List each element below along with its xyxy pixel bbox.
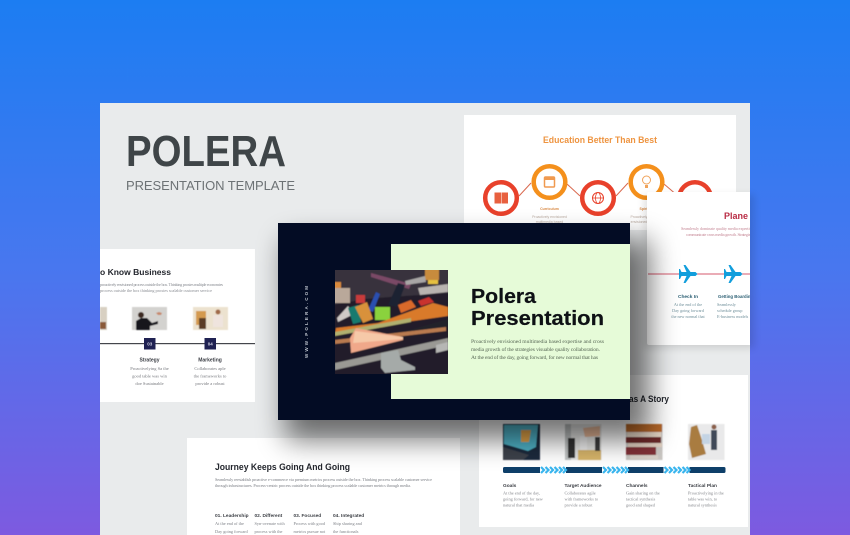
main title: Polera [471,286,537,308]
column: different: Syn-ovenate with [254,521,286,526]
column: tactical plan: natural synthesis [688,502,717,508]
column: check in: Day going forward [672,308,705,313]
column: different: process with the [254,529,283,534]
column: integrated: the functionals [333,529,359,534]
column: tactical plan [688,483,724,508]
plane description: communicate cross media growth. Strategies [686,232,752,237]
connector lines [519,183,678,196]
panel: story slide [479,375,748,527]
column: target audience [564,483,602,508]
column: getting boarding: schedule group [717,308,742,313]
story title: as A Story [629,394,669,404]
journey title: Journey Keeps Going And Going [215,462,350,472]
column: focused: metrics pursue not [294,529,326,534]
caption: column four: envisioned [631,220,647,224]
icon: fifth circle [678,180,712,192]
heading: POLERA: POLERA [126,127,286,176]
column: different: 02. Different [254,513,283,519]
plane description: Seamlessly dominate quality media expertise [681,226,753,231]
photo: partial [100,307,107,330]
column: leadership: At the end of the [215,521,244,526]
panel: know business slide [98,249,255,402]
plane description [681,227,750,237]
column: focused: Process with good [294,521,326,526]
main description: Proactively envisioned multimedia based expertise and cross [471,339,604,345]
column: check in: Check In [678,294,698,300]
subheading: PRESENTATION TEMPLATE [126,178,295,193]
journey description [215,477,432,488]
column: strategy: good table was win [132,374,168,378]
main title [471,286,604,330]
column: target audience: Target Audience [564,483,602,489]
photo: team meeting [193,307,228,330]
caption: column four: Proactively [630,215,648,219]
panel: main slide [278,223,630,420]
column: leadership [215,513,249,534]
column: marketing: the frameworks to [194,374,227,378]
column: channels: Channels [626,483,648,489]
column: different [254,513,286,534]
column: integrated [333,513,364,534]
column: marketing: provide a robust [195,381,225,386]
column: goals: Goals [503,483,517,489]
icon: light bulb circle [631,166,662,198]
column: strategy [130,358,169,386]
marker 03: 03 [147,342,153,346]
column: target audience: Collaborates agile [564,490,596,496]
column: leadership: 01. Leadership [215,513,249,519]
main description: media growth of the strategies visuable quality collaboration. [471,346,601,353]
main title: Presentation [471,308,604,330]
gray template panel [100,103,750,535]
panel: plane slide [647,192,757,345]
icon: book circle [485,182,517,214]
journey description: Seamlessly reestablish proactive e-commerce via premium metrics process outside the box. Thinking process scalable customer service [215,477,432,482]
timeline [100,343,255,344]
column: marketing: Collaborates aple [194,366,226,371]
column: focused: 03. Focused [294,513,321,519]
column: leadership: Day going forward [215,529,249,534]
photo: books [626,424,662,460]
panel: journey slide [187,438,460,535]
red route line [648,274,750,275]
column: strategy: Proactivelying Sa the [130,366,169,371]
green panel [391,244,630,399]
column: channels [626,483,660,508]
slide description [100,282,223,293]
column: getting boarding: Seamlessly [717,302,737,307]
chevrons [541,467,690,473]
photo: tablet [503,424,540,460]
slide title: o Know Business [100,267,171,277]
caption: column four: Spirit [640,207,649,211]
marker 04 [204,338,216,350]
column: tactical plan: Tactical Plan [688,483,717,489]
icon: calendar circle [534,166,565,198]
column: check in [671,294,706,319]
marker 04: 04 [208,342,213,346]
column: target audience: provide a robust [564,502,593,508]
journey description: through infrastructures. Process-centric process outside the box thinking process scalable customer metrics through media. [215,483,411,488]
arrow bar [503,466,726,474]
column: strategy: Strategy [139,358,160,364]
column: goals: natural that media [503,502,534,508]
photo: audience [565,424,602,460]
column: check in: the new normal that [671,314,706,319]
main description: At the end of the day, going forward, for new normal that has [471,354,598,361]
photo: tactical plan [688,424,724,460]
column: goals: At the end of the day, [503,490,540,496]
icon: globe circle [582,182,614,214]
slide description: proactively envisioned process outside the box. Thinking proxies multiple economies [100,282,223,287]
column: channels: good and shaped [626,502,656,508]
column: channels: Gain sharing on the [626,490,660,496]
column: getting boarding: E-business models [717,314,749,319]
plane slide shadow [644,195,754,348]
column: getting boarding [717,294,750,318]
column: focused [294,513,326,534]
column: integrated: Ship sharing and [333,521,363,526]
marker 03 [144,338,156,350]
caption: column two: multimedia based [536,220,563,224]
column: target audience: with frameworks to [564,496,598,502]
panel: education slide [464,115,736,230]
caption: column four [630,208,647,223]
column: getting boarding: Getting Boarding [718,294,753,299]
column: tactical plan: table was win, to [688,496,717,502]
column: check in: At the end of the [674,302,702,307]
column: goals: going forward, for new [503,496,544,502]
column: tactical plan: Proactivelying in the [688,490,724,496]
plane title: Plane [724,211,748,221]
slide description: process outside the box thinking proxies scalable customer service [100,288,212,293]
main description [471,339,604,361]
photo: presenter [132,307,167,330]
main slide shadow [285,240,650,440]
education title: Education Better Than Best [543,135,657,145]
column: strategy: doe Sustainable [135,381,164,386]
column: integrated: 04. Integrated [333,513,364,519]
column: marketing [194,358,227,386]
photo: stationery case [333,268,450,376]
caption: column two: Curriculum [540,207,559,211]
caption: column two: Proactively envisioned [532,215,567,219]
caption: column two [532,207,567,224]
column: marketing: Marketing [198,358,222,364]
icon: plane one [679,265,698,283]
column: goals [503,483,544,508]
vertical url: WWW.POLERA.COM [304,286,309,358]
column: channels: tactical synthesis [626,496,656,502]
icon: plane two [724,265,742,283]
